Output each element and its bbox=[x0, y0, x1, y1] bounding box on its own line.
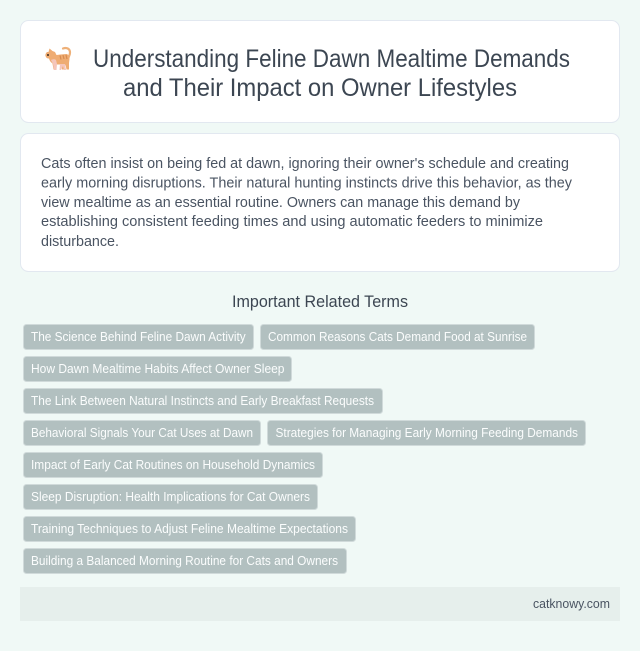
tag: The Science Behind Feline Dawn Activity bbox=[31, 329, 246, 344]
tag: Strategies for Managing Early Morning Feeding Demands bbox=[276, 425, 578, 440]
tag: Impact of Early Cat Routines on Household Dynamics bbox=[31, 457, 315, 472]
summary paragraph bbox=[41, 155, 572, 250]
tag bbox=[24, 452, 322, 478]
summary paragraph: view mealtime as an essential routine. Owners can manage this demand by bbox=[41, 194, 520, 211]
tag bbox=[24, 324, 254, 350]
tag: How Dawn Mealtime Habits Affect Owner Sleep bbox=[31, 361, 284, 376]
tag: Training Techniques to Adjust Feline Mealtime Expectations bbox=[31, 521, 348, 536]
summary paragraph: Cats often insist on being fed at dawn, ignoring their owner's schedule and creating bbox=[41, 155, 569, 172]
tag bbox=[260, 324, 534, 350]
title bbox=[93, 45, 570, 102]
tag: Common Reasons Cats Demand Food at Sunrise bbox=[268, 329, 527, 344]
summary paragraph: disturbance. bbox=[41, 233, 119, 250]
tag: Sleep Disruption: Health Implications for Cat Owners bbox=[31, 489, 310, 504]
tag: Behavioral Signals Your Cat Uses at Dawn bbox=[31, 425, 253, 440]
tag bbox=[24, 548, 346, 574]
summary paragraph: early morning disruptions. Their natural hunting instincts drive this behavior, as they bbox=[41, 174, 572, 192]
tag bbox=[268, 420, 586, 446]
icon: cat bbox=[45, 48, 70, 70]
tag bbox=[24, 484, 318, 510]
tag bbox=[24, 356, 292, 382]
tag: The Link Between Natural Instincts and Early Breakfast Requests bbox=[31, 393, 374, 408]
panel: title card bbox=[20, 20, 620, 122]
title: Understanding Feline Dawn Mealtime Demands bbox=[93, 45, 570, 73]
title: and Their Impact on Owner Lifestyles bbox=[123, 74, 517, 102]
tag bbox=[24, 388, 382, 414]
summary paragraph: establishing consistent feeding times and using automatic feeders to minimize bbox=[41, 213, 543, 230]
tag: Building a Balanced Morning Routine for Cats and Owners bbox=[31, 553, 338, 568]
footer bbox=[20, 587, 620, 621]
tag bbox=[24, 516, 356, 542]
panel: summary card bbox=[20, 134, 620, 272]
footer: catknowy.com bbox=[533, 596, 610, 611]
tag bbox=[24, 420, 260, 446]
heading: related terms: Important Related Terms bbox=[232, 293, 408, 311]
tag cloud bbox=[24, 324, 586, 574]
